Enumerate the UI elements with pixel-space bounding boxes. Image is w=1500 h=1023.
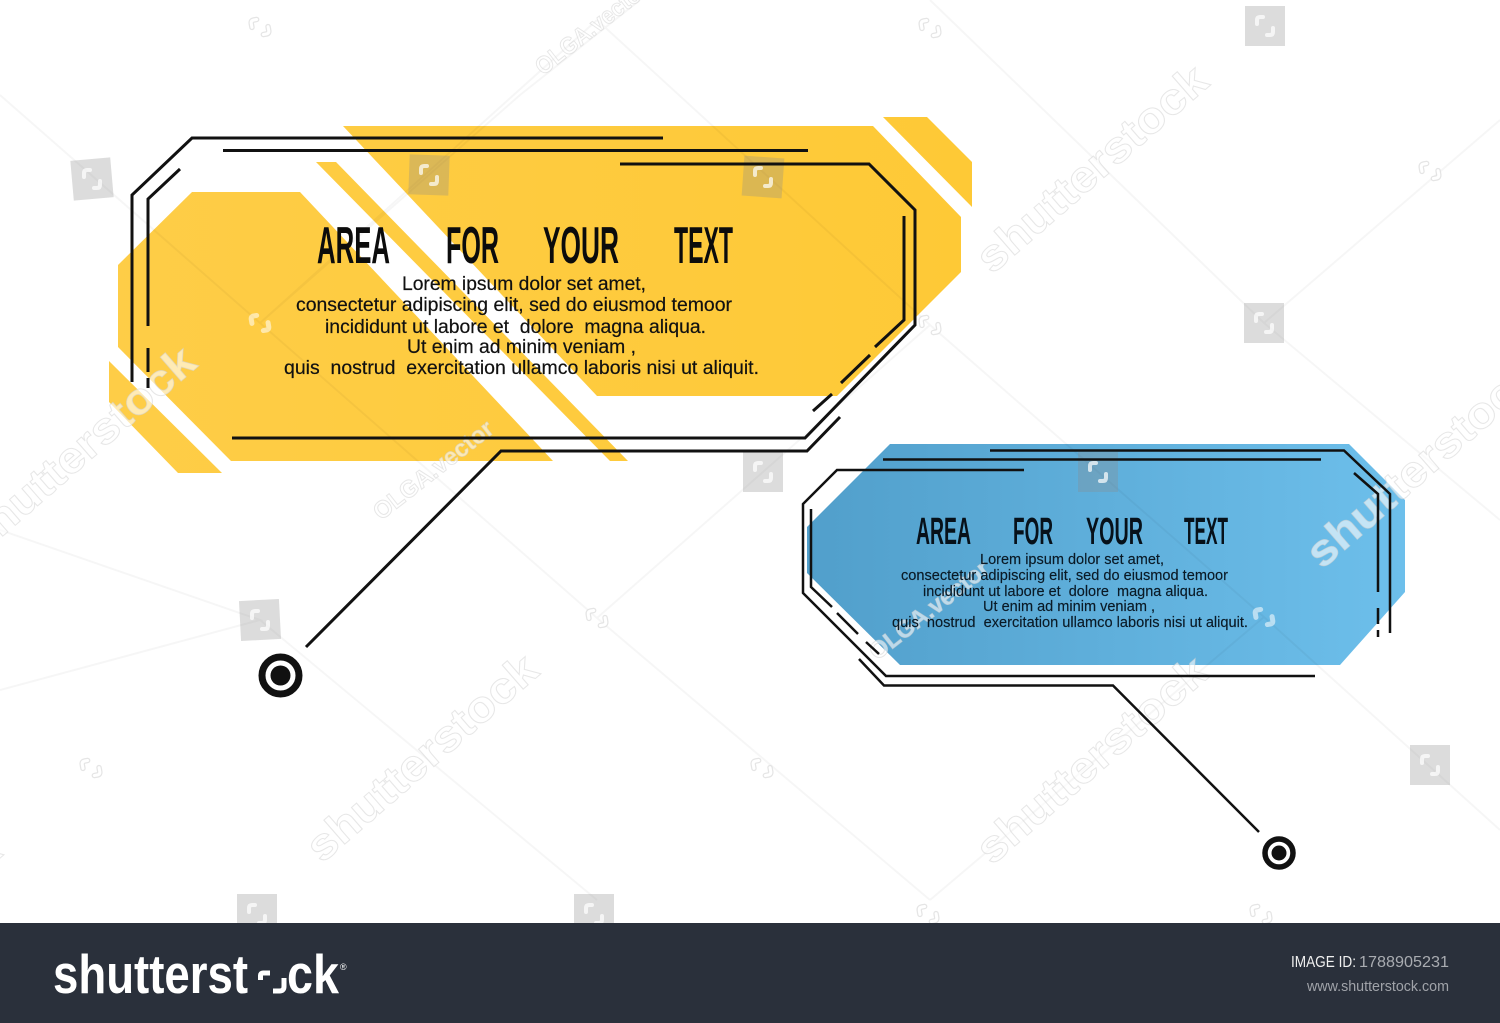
footer logo: ® xyxy=(340,962,347,972)
yellow callout body text: Lorem ipsum dolor set amet, xyxy=(402,274,646,295)
yellow callout heading xyxy=(317,217,733,275)
blue callout black frame lines xyxy=(803,450,1390,832)
yellow callout body text: consectetur adipiscing elit, sed do eiusmod temoor xyxy=(296,295,733,316)
footer image id xyxy=(1291,954,1449,971)
panel: blue callout shape xyxy=(807,444,1405,665)
yellow callout heading: AREA xyxy=(317,217,390,275)
yellow callout target marker xyxy=(262,657,299,694)
watermark layer: OLGA.vector xyxy=(368,415,499,526)
panel: yellow callout shapes xyxy=(109,117,972,473)
blue callout heading: FOR xyxy=(1013,511,1053,553)
footer image id: 1788905231 xyxy=(1359,954,1449,971)
blue callout body text: consectetur adipiscing elit, sed do eiusmod temoor xyxy=(901,568,1228,584)
footer bar xyxy=(0,923,1500,1023)
yellow callout body text: quis nostrud exercitation ullamco laboris nisi ut aliquit. xyxy=(284,358,759,379)
yellow callout heading: YOUR xyxy=(543,217,619,275)
text: TEXT xyxy=(1184,511,1228,553)
watermark layer: shutterstock xyxy=(296,644,548,872)
blue callout body text: Lorem ipsum dolor set amet, xyxy=(980,552,1164,568)
yellow callout heading: FOR xyxy=(446,217,499,275)
watermark layer: OLGA.vector xyxy=(864,555,995,666)
blue callout heading: YOUR xyxy=(1086,511,1143,553)
blue callout target marker xyxy=(1265,839,1293,867)
yellow callout body text: Ut enim ad minim veniam , xyxy=(407,337,636,358)
blue callout body text: quis nostrud exercitation ullamco laboris nisi ut aliquit. xyxy=(892,615,1248,631)
footer image id: IMAGE ID: xyxy=(1291,954,1356,971)
yellow callout body text: incididunt ut labore et dolore magna aliqua. xyxy=(325,317,706,338)
text: TEXT xyxy=(674,217,733,275)
footer logo: ck xyxy=(287,943,339,1005)
blue callout heading: AREA xyxy=(916,511,971,553)
blue callout body text: Ut enim ad minim veniam , xyxy=(983,599,1155,615)
footer website: www.shutterstock.com xyxy=(1306,979,1449,995)
blue callout body text xyxy=(892,552,1248,631)
watermark layer: shutterstock xyxy=(966,55,1218,283)
watermark layer: shutterstock xyxy=(966,646,1218,874)
footer logo: shutterst xyxy=(53,943,248,1005)
blue callout body text: incididunt ut labore et dolore magna aliqua. xyxy=(923,584,1208,600)
yellow callout body text xyxy=(284,274,759,379)
yellow callout black frame lines xyxy=(132,138,915,647)
blue callout heading xyxy=(916,511,1228,553)
